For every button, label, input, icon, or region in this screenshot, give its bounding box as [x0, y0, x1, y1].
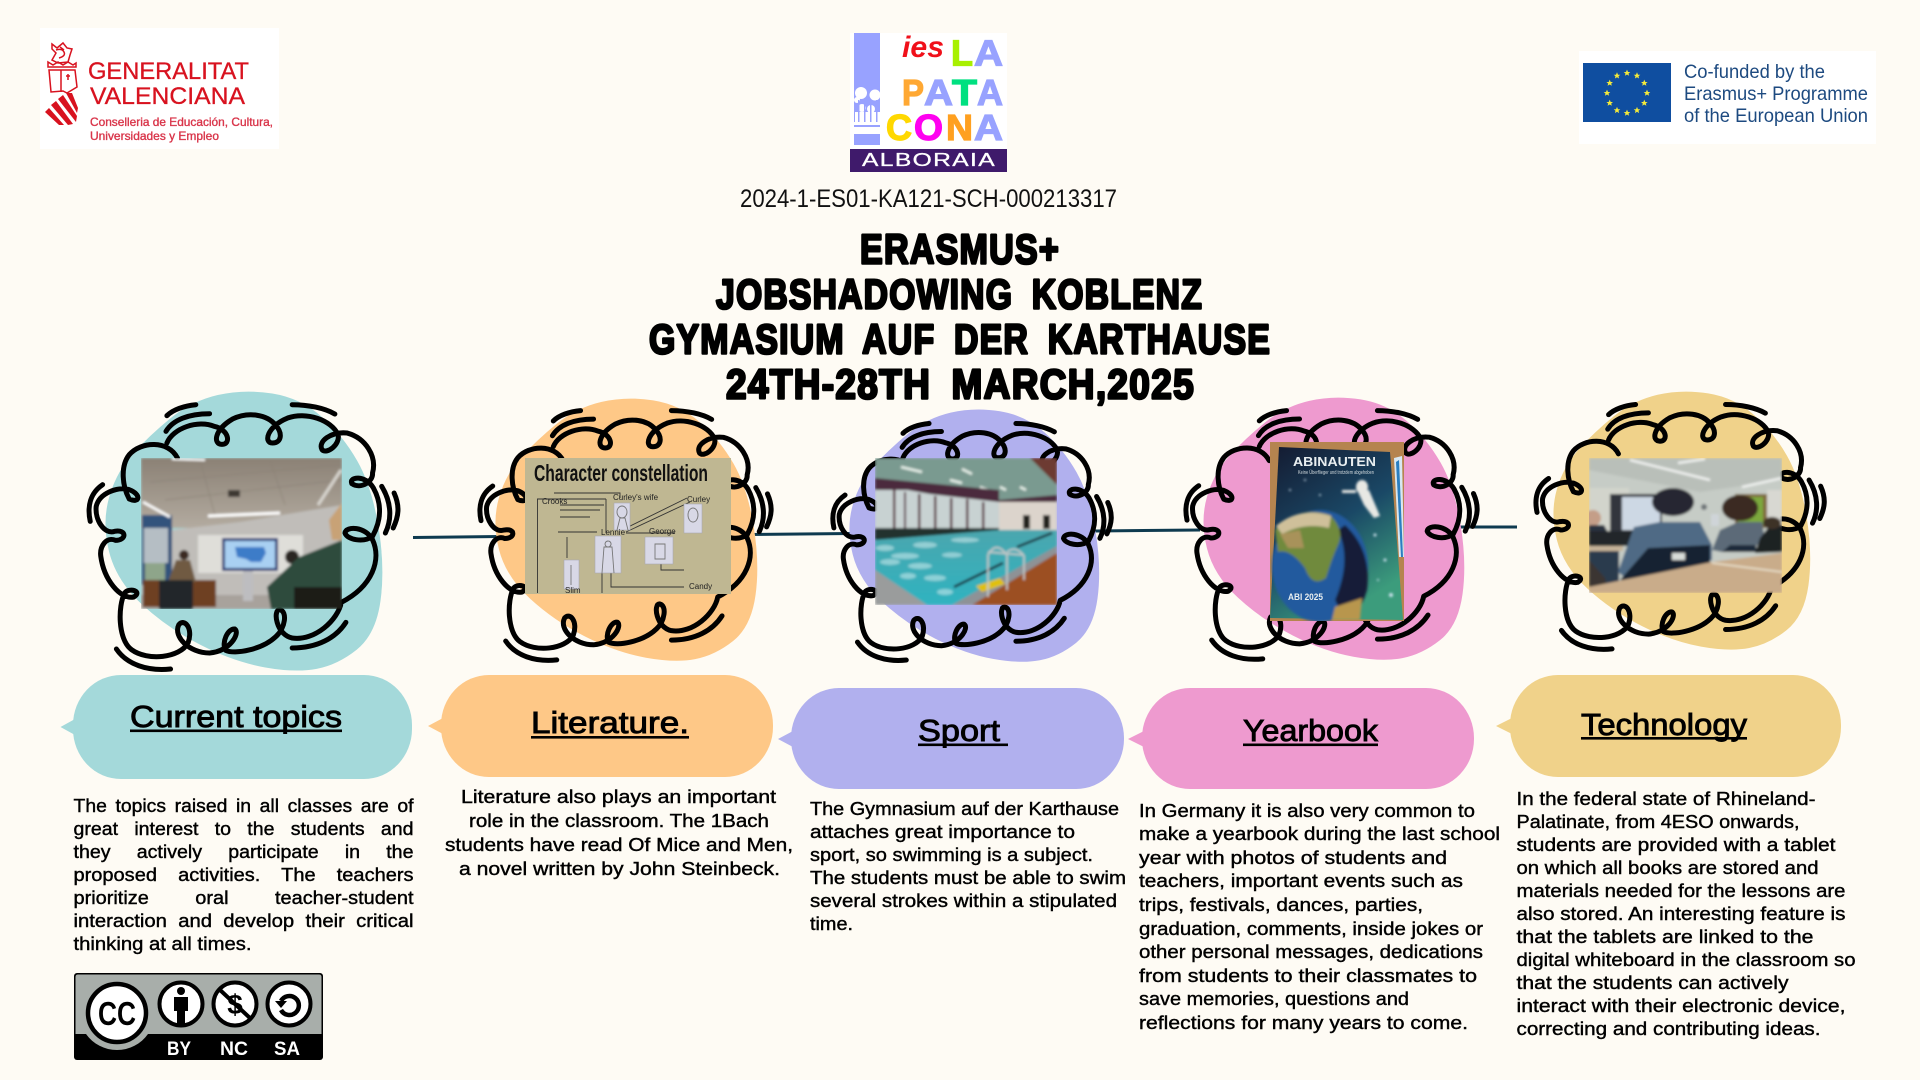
- pill: literature heading: [428, 675, 773, 777]
- pill: technology heading: [1496, 675, 1841, 777]
- photo: character constellation poster: George: [649, 527, 676, 536]
- logo: EU co-funded: [1579, 51, 1876, 144]
- text: current topics: great interest to the students and: [74, 819, 414, 839]
- doodle frame: [480, 411, 771, 660]
- text: technology: that the students can actively: [1516, 973, 1788, 993]
- photo: character constellation poster: Lennie: [601, 528, 626, 537]
- text: yearbook: In Germany it is also very common to: [1139, 801, 1475, 821]
- photo: classroom with screen: [141, 458, 342, 609]
- photo: swimming pool: [875, 458, 1057, 605]
- text: current topics: interaction and develop their critical: [74, 911, 413, 931]
- photo: yearbook cover: Keine Überflieger und trotzdem abgehoben: [1298, 469, 1374, 476]
- panel: current topics: [60, 392, 415, 954]
- logo: IES La Patacona Alboraia: ies: [902, 31, 944, 64]
- text: technology: on which all books are stored and: [1516, 858, 1818, 878]
- text: current topics: they actively participate in the: [74, 842, 413, 862]
- text: yearbook: reflections for many years to come.: [1139, 1013, 1468, 1033]
- title: ERASMUS+: [860, 226, 1060, 272]
- photo: yearbook cover: ABINAUTEN: [1293, 454, 1376, 469]
- blob: teal: [105, 392, 382, 671]
- pill: literature heading: Literature.: [531, 705, 689, 740]
- text: technology: In the federal state of Rhineland-: [1516, 789, 1816, 809]
- logo: EU co-funded: Co-funded by the: [1684, 61, 1825, 83]
- title: [649, 226, 1271, 408]
- title: GYMASIUM AUF DER KARTHAUSE: [649, 316, 1271, 362]
- photo: character constellation poster: [525, 458, 731, 595]
- text: yearbook: year with photos of students and: [1139, 848, 1447, 868]
- text: technology: [1516, 789, 1856, 1039]
- timeline connector lines: [413, 527, 1517, 538]
- blob: pink: [1204, 398, 1464, 660]
- photo: character constellation poster: Slim: [565, 586, 581, 595]
- text: current topics: The topics raised in all classes are of: [74, 796, 415, 816]
- badge: Creative Commons BY-NC-SA: SA: [274, 1039, 300, 1060]
- panel: sport: [778, 410, 1126, 934]
- logo: Generalitat Valenciana: Conselleria de Educación, Cultura,: [90, 115, 273, 129]
- logo: Generalitat Valenciana: [40, 28, 279, 149]
- text: yearbook: trips, festivals, dances, parties,: [1139, 895, 1423, 915]
- text: yearbook: from students to their classmates to: [1139, 966, 1477, 986]
- text: technology: students are provided with a tablet: [1516, 835, 1836, 855]
- text: sport: [810, 799, 1126, 934]
- pill: current topics heading: [60, 675, 412, 779]
- logo: Generalitat Valenciana: VALENCIANA: [90, 83, 245, 110]
- text: yearbook: teachers, important events such as: [1139, 871, 1463, 891]
- blob: orange: [495, 399, 757, 661]
- title: JOBSHADOWING KOBLENZ: [716, 270, 1203, 318]
- text: sport: time.: [810, 914, 853, 934]
- pill: current topics heading: Current topics: [130, 699, 342, 734]
- pill: yearbook heading: [1128, 688, 1474, 789]
- badge: Creative Commons BY-NC-SA: BY: [167, 1039, 191, 1060]
- doodle frame: [1536, 405, 1824, 649]
- logo: IES La Patacona Alboraia: A: [974, 107, 1003, 148]
- logo: IES La Patacona Alboraia: N: [946, 107, 973, 148]
- photo: character constellation poster: Character constellation: [534, 460, 708, 486]
- photo: yearbook cover: [1270, 442, 1404, 622]
- doodle frame: [833, 423, 1111, 660]
- logo: IES La Patacona Alboraia: P: [902, 72, 924, 113]
- text: technology: Palatinate, from 4ESO onwards,: [1516, 812, 1800, 832]
- text: literature: [445, 787, 793, 879]
- logo: IES La Patacona Alboraia: O: [914, 107, 943, 148]
- text: current topics: thinking at all times.: [74, 934, 252, 954]
- text: literature: role in the classroom. The 1Bach: [469, 811, 769, 831]
- text: yearbook: graduation, comments, inside jokes or: [1139, 919, 1483, 939]
- text: yearbook: make a yearbook during the last school: [1139, 824, 1500, 844]
- text: yearbook: other personal messages, dedications: [1139, 942, 1483, 962]
- text: literature: Literature also plays an important: [461, 787, 776, 807]
- logo: Generalitat Valenciana: GENERALITAT: [88, 58, 249, 85]
- doodle frame: [1186, 411, 1477, 659]
- text: yearbook: save memories, questions and: [1139, 989, 1409, 1009]
- badge: Creative Commons BY-NC-SA: [74, 973, 323, 1060]
- text: technology: also stored. An interesting feature is: [1516, 904, 1846, 924]
- logo: EU co-funded: of the European Union: [1684, 105, 1868, 127]
- text: sport: sport, so swimming is a subject.: [810, 845, 1093, 865]
- blob: gold: [1553, 392, 1810, 650]
- pill: technology heading: Technology: [1581, 707, 1748, 742]
- photo: students in class: [1585, 458, 1782, 593]
- pill: sport heading: [778, 688, 1124, 789]
- logo: IES La Patacona Alboraia: [850, 31, 1007, 172]
- badge: Creative Commons BY-NC-SA: NC: [220, 1039, 248, 1060]
- blob: lavender: [849, 410, 1099, 662]
- logo: IES La Patacona Alboraia: ALBORAIA: [862, 150, 996, 170]
- text: sport: The students must be able to swim: [810, 868, 1126, 888]
- text: technology: correcting and contributing ideas.: [1516, 1019, 1820, 1039]
- photo: character constellation poster: Crooks: [542, 497, 567, 506]
- text: technology: that the tablets are linked to the: [1516, 927, 1814, 947]
- logo: IES La Patacona Alboraia: A: [924, 72, 953, 113]
- title: 24TH-28TH MARCH,2025: [726, 360, 1195, 408]
- logo: IES La Patacona Alboraia: L: [951, 32, 973, 74]
- logo: Generalitat Valenciana: Universidades y Empleo: [90, 129, 219, 143]
- project code: 2024-1-ES01-KA121-SCH-000213317: [740, 185, 1117, 213]
- logo: IES La Patacona Alboraia: T: [952, 72, 977, 113]
- photo: character constellation poster: Curley's wife: [613, 493, 659, 502]
- pill: yearbook heading: Yearbook: [1243, 713, 1379, 748]
- text: sport: The Gymnasium auf der Karthause: [810, 799, 1119, 819]
- panel: yearbook: [1128, 398, 1500, 1033]
- text: current topics: proposed activities. The teachers: [74, 865, 414, 885]
- text: current topics: prioritize oral teacher-student: [74, 888, 414, 908]
- text: current topics: [74, 796, 415, 954]
- text: technology: materials needed for the lessons are: [1516, 881, 1846, 901]
- text: sport: attaches great importance to: [810, 822, 1075, 842]
- text: literature: a novel written by John Steinbeck.: [459, 859, 780, 879]
- logo: EU co-funded: Erasmus+ Programme: [1684, 83, 1868, 105]
- logo: IES La Patacona Alboraia: A: [977, 72, 1003, 113]
- panel: literature: [428, 399, 793, 879]
- text: technology: digital whiteboard in the classroom so: [1516, 950, 1856, 970]
- photo: character constellation poster: Candy: [689, 582, 712, 591]
- logo: IES La Patacona Alboraia: C: [886, 107, 912, 148]
- badge: Creative Commons BY-NC-SA: $: [227, 989, 243, 1020]
- pill: sport heading: Sport: [918, 713, 1000, 748]
- text: yearbook: [1139, 801, 1500, 1033]
- photo: yearbook cover: ABI 2025: [1288, 592, 1323, 602]
- text: literature: students have read Of Mice and Men,: [445, 835, 793, 855]
- doodle frame: [89, 405, 398, 669]
- text: sport: several strokes within a stipulated: [810, 891, 1117, 911]
- panel: technology: [1496, 392, 1856, 1039]
- logo: IES La Patacona Alboraia: A: [974, 32, 1003, 74]
- photo: character constellation poster: Curley: [687, 495, 710, 504]
- text: technology: interact with their electronic device,: [1516, 996, 1846, 1016]
- badge: Creative Commons BY-NC-SA: CC: [98, 995, 136, 1032]
